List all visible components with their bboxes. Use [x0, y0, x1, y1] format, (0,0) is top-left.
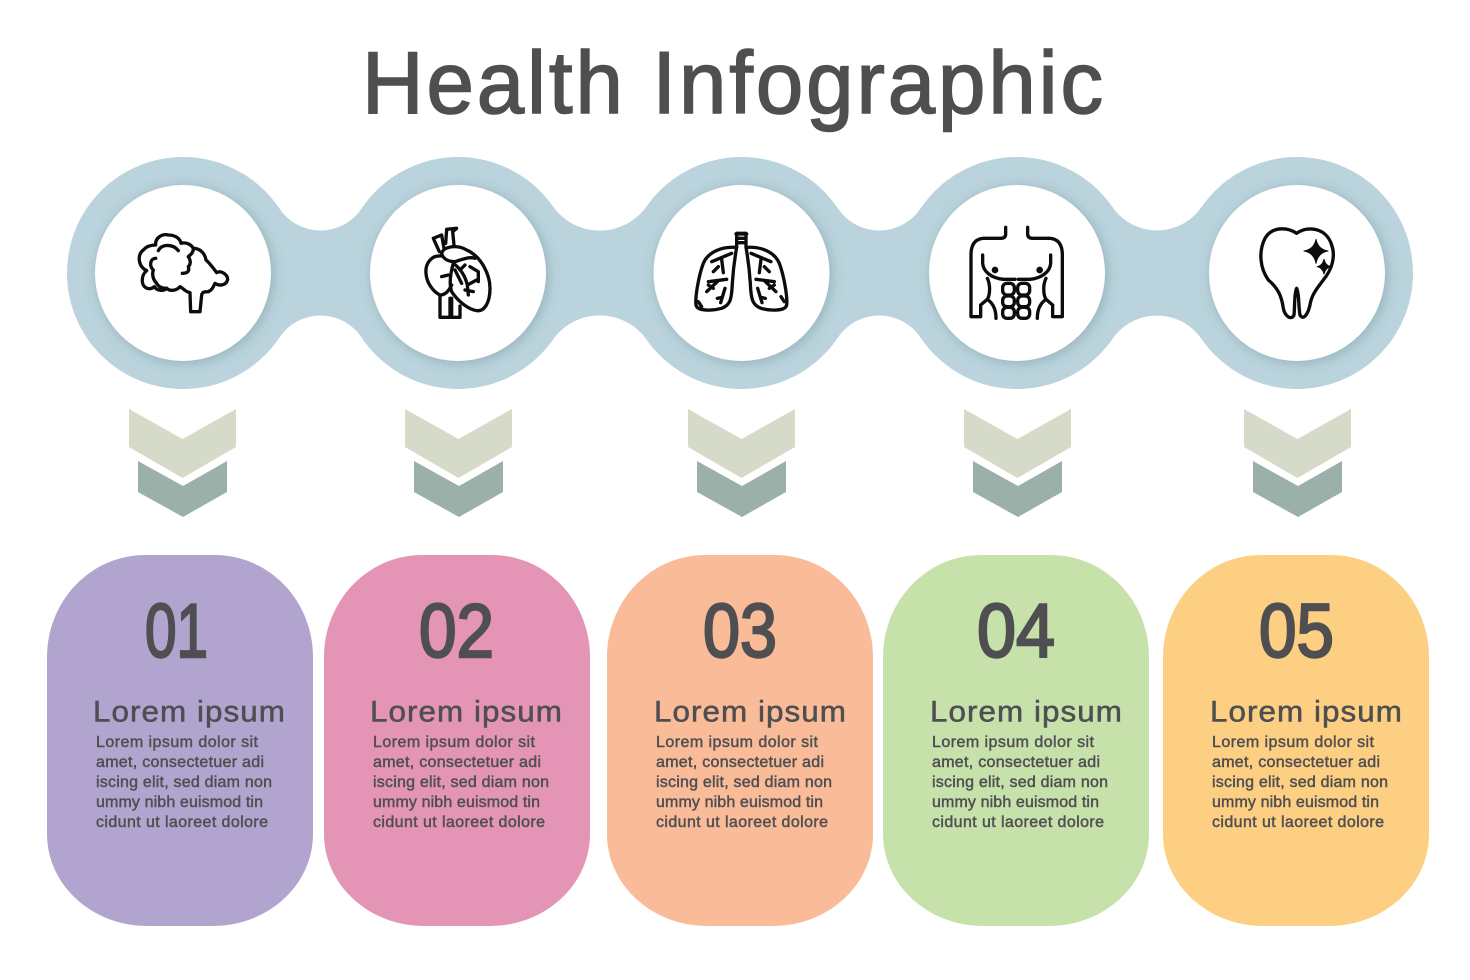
body text 02: ummy nibh euismod tin: [373, 794, 540, 811]
body text 03: ummy nibh euismod tin: [656, 794, 823, 811]
body text 04: Lorem ipsum dolor sit: [932, 734, 1095, 751]
number 01: 01: [145, 589, 208, 674]
arrow: chevrons 5: [1244, 409, 1351, 517]
body text 03: iscing elit, sed diam non: [656, 774, 832, 791]
body text 02: iscing elit, sed diam non: [373, 774, 549, 791]
title: Health Infographic: [362, 33, 1106, 132]
body text 05: Lorem ipsum dolor sit: [1212, 734, 1375, 751]
panel: step 01: [47, 555, 313, 926]
body text 04: iscing elit, sed diam non: [932, 774, 1108, 791]
body text 05: cidunt ut laoreet dolore: [1212, 814, 1384, 831]
body text 05: iscing elit, sed diam non: [1212, 774, 1388, 791]
heading 01: Lorem ipsum: [93, 696, 286, 728]
body text 01: [96, 734, 272, 831]
body text 03: cidunt ut laoreet dolore: [656, 814, 828, 831]
arrow: chevrons 2: [405, 409, 512, 517]
body text 04: cidunt ut laoreet dolore: [932, 814, 1104, 831]
body text 01: iscing elit, sed diam non: [96, 774, 272, 791]
number 04: 04: [977, 589, 1055, 674]
arrow: chevrons 4: [964, 409, 1071, 517]
arrow: chevrons 3: [688, 409, 795, 517]
icon: lungs: [696, 233, 787, 310]
body text 02: Lorem ipsum dolor sit: [373, 734, 536, 751]
body text 03: amet, consectetuer adi: [656, 754, 824, 771]
body text 02: [373, 734, 549, 831]
panel: step 02: [324, 555, 590, 926]
body text 01: amet, consectetuer adi: [96, 754, 264, 771]
body text 01: cidunt ut laoreet dolore: [96, 814, 268, 831]
icon: brain: [139, 235, 228, 312]
panel: step 03: [607, 555, 873, 926]
body text 05: ummy nibh euismod tin: [1212, 794, 1379, 811]
number 02: 02: [419, 589, 494, 674]
heading 03: Lorem ipsum: [654, 696, 847, 728]
body text 02: cidunt ut laoreet dolore: [373, 814, 545, 831]
body text 04: ummy nibh euismod tin: [932, 794, 1099, 811]
icon: torso: [971, 227, 1062, 318]
body text 05: amet, consectetuer adi: [1212, 754, 1380, 771]
body text 03: Lorem ipsum dolor sit: [656, 734, 819, 751]
body text 04: [932, 734, 1108, 831]
circle: white icon discs: [95, 185, 1385, 361]
body text 04: amet, consectetuer adi: [932, 754, 1100, 771]
body text 01: ummy nibh euismod tin: [96, 794, 263, 811]
arrow: chevrons 1: [129, 409, 236, 517]
body text 03: [656, 734, 832, 831]
panel: step 04: [883, 555, 1149, 926]
heading 05: Lorem ipsum: [1210, 696, 1403, 728]
body text 01: Lorem ipsum dolor sit: [96, 734, 259, 751]
icon: heart: [426, 228, 490, 317]
number 03: 03: [703, 589, 777, 674]
panel: step 05: [1163, 555, 1429, 926]
connected ring band: [67, 157, 1413, 389]
heading 02: Lorem ipsum: [370, 696, 563, 728]
icon: tooth: [1261, 229, 1333, 318]
heading 04: Lorem ipsum: [930, 696, 1123, 728]
number 05: 05: [1259, 589, 1334, 674]
body text 02: amet, consectetuer adi: [373, 754, 541, 771]
body text 05: [1212, 734, 1388, 831]
